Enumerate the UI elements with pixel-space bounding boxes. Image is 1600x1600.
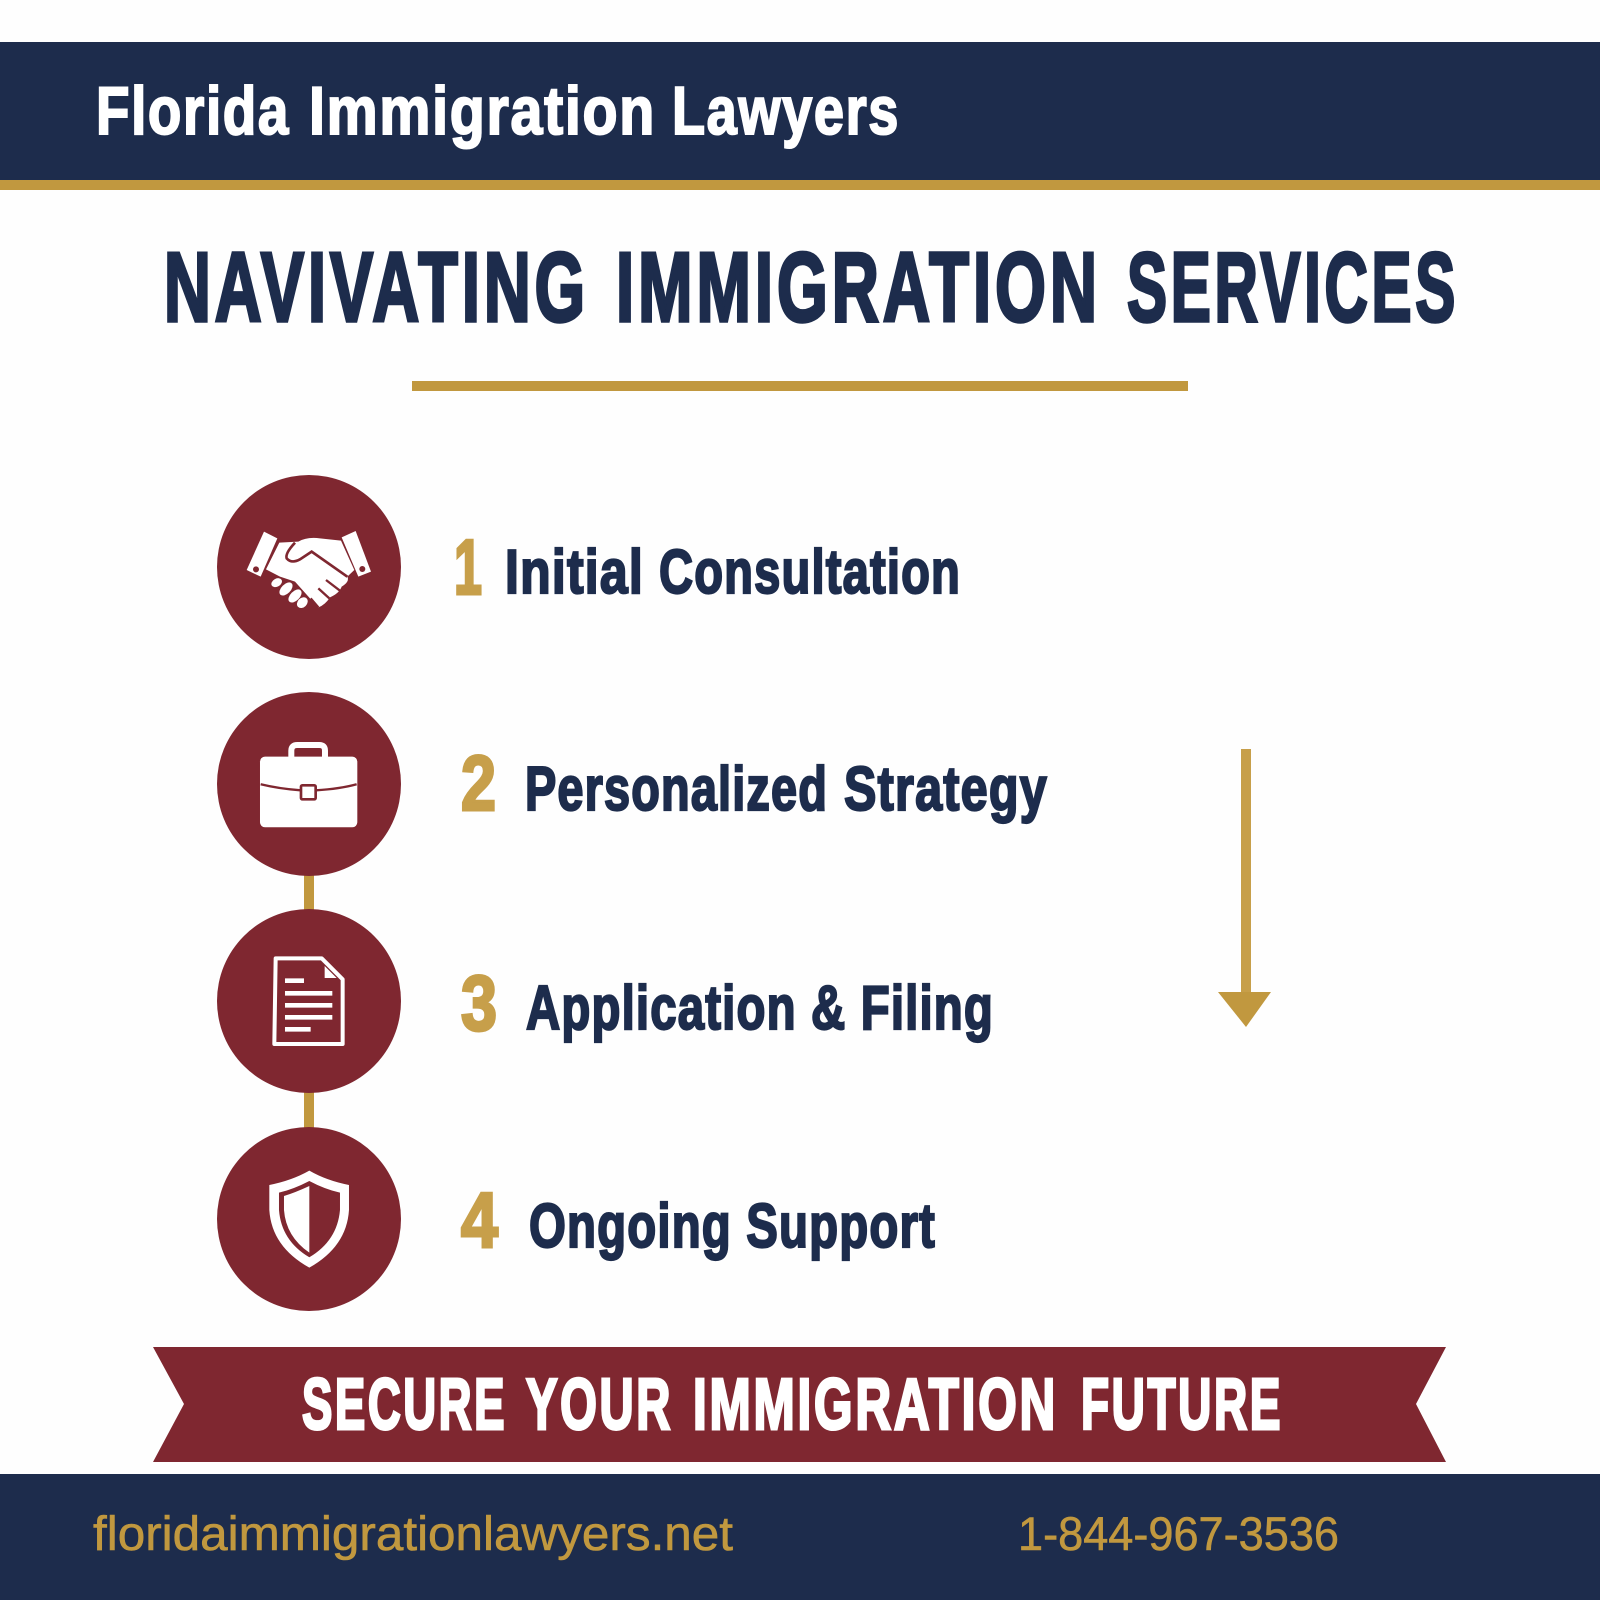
title: NAVIVATING bbox=[164, 232, 589, 342]
connector: step 2 to step 3 bbox=[304, 870, 314, 910]
banner text: SECURE bbox=[302, 1365, 507, 1445]
website: floridaimmigrationlawyers.net bbox=[93, 1508, 733, 1561]
connector: step 3 to step 4 bbox=[304, 1088, 314, 1132]
label: Consultation bbox=[659, 538, 961, 607]
header band bbox=[0, 42, 1600, 190]
step 3: application and filing bbox=[217, 909, 994, 1093]
label: Initial bbox=[505, 538, 644, 607]
firm name: Lawyers bbox=[672, 73, 900, 149]
label: Strategy bbox=[844, 755, 1048, 824]
footer band bbox=[0, 1474, 1600, 1600]
icon: handshake bbox=[217, 475, 401, 659]
label: Personalized bbox=[525, 755, 828, 824]
ribbon banner bbox=[153, 1347, 1446, 1462]
icon: briefcase bbox=[217, 692, 401, 876]
label: Ongoing Support bbox=[529, 1192, 936, 1261]
number 1: 1 bbox=[454, 523, 482, 611]
number 4: 4 bbox=[461, 1176, 498, 1264]
phone number: 1-844-967-3536 bbox=[1018, 1507, 1339, 1560]
banner text: YOUR bbox=[526, 1365, 673, 1445]
banner text: FUTURE bbox=[1081, 1365, 1283, 1445]
title: IMMIGRATION bbox=[616, 232, 1101, 342]
title underline bbox=[412, 381, 1188, 391]
number 3: 3 bbox=[461, 959, 497, 1047]
label: Application & Filing bbox=[526, 974, 994, 1043]
step 1: initial consultation bbox=[217, 475, 961, 659]
step 4: ongoing support bbox=[217, 1127, 936, 1311]
icon: shield bbox=[217, 1127, 401, 1311]
step 2: personalized strategy bbox=[217, 692, 1048, 876]
banner text: IMMIGRATION bbox=[693, 1365, 1058, 1445]
arrow: process direction bbox=[1218, 749, 1271, 1027]
firm name: Immigration bbox=[309, 73, 656, 149]
number 2: 2 bbox=[461, 739, 496, 827]
firm name: Florida bbox=[96, 73, 290, 149]
icon: document bbox=[217, 909, 401, 1093]
